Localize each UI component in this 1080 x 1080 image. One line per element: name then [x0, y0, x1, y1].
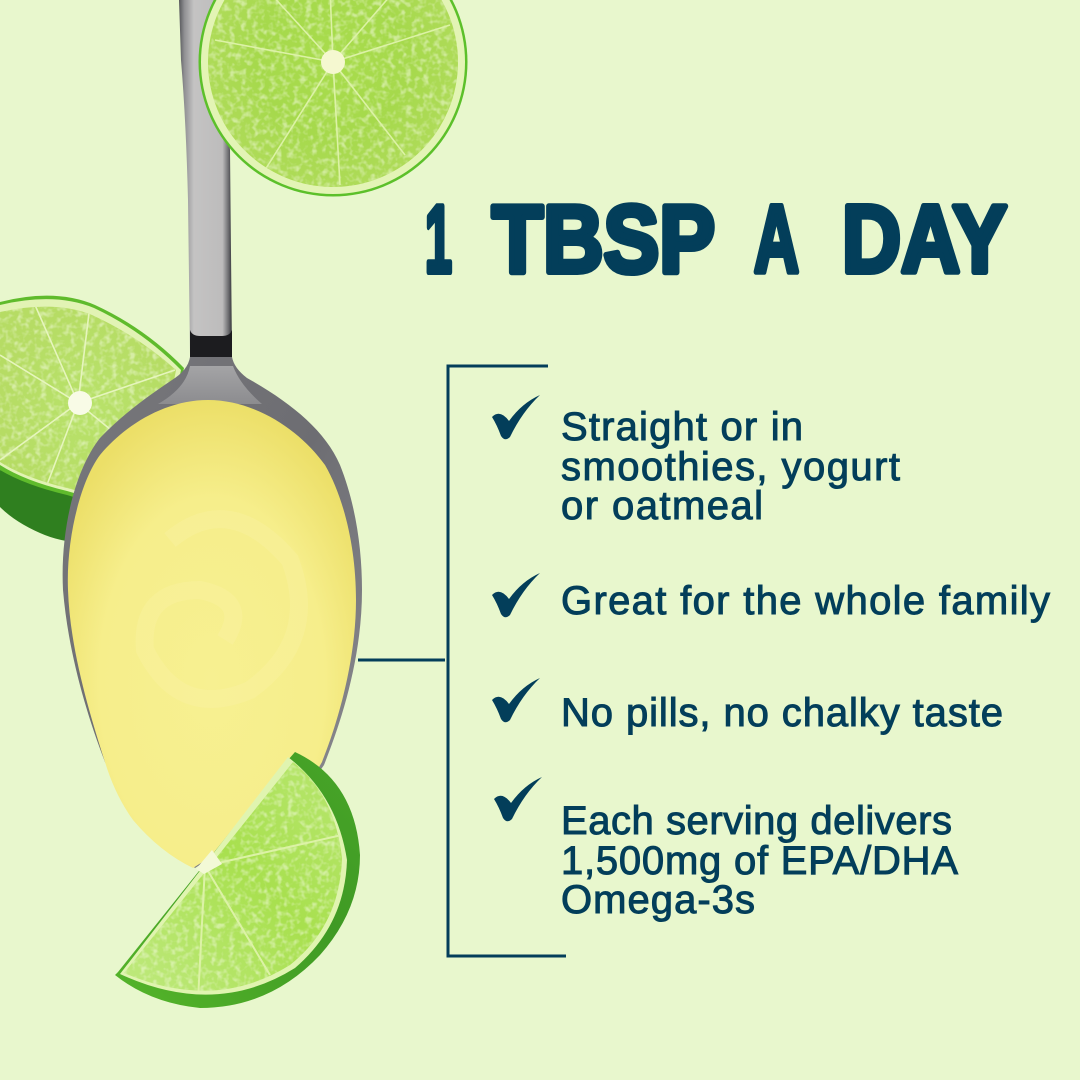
lime slice: left half, behind spoon — [0, 290, 190, 543]
benefit: omega-3s — [494, 777, 958, 922]
rind of wedge — [115, 752, 360, 1008]
title — [425, 186, 1007, 293]
text — [561, 405, 900, 528]
handle shading — [190, 330, 232, 358]
lime slice: top — [198, 0, 468, 196]
rind of top lime — [198, 0, 468, 196]
pith centre of top lime — [321, 50, 345, 74]
text: Great for the whole family — [561, 579, 1050, 623]
benefit: no pills — [492, 678, 1003, 735]
text: No pills, no chalky taste — [561, 691, 1003, 735]
title: A — [754, 186, 799, 293]
icon: check — [494, 777, 542, 821]
spoon bowl — [63, 357, 362, 868]
oil in bowl — [68, 400, 356, 868]
text: Straight or in — [561, 405, 803, 449]
bowl highlight — [158, 366, 262, 404]
pith centre of left lime — [68, 391, 92, 415]
rind of left lime — [0, 470, 90, 543]
bracket — [448, 366, 566, 956]
spoon — [63, 0, 362, 868]
pulp texture of top lime — [198, 0, 468, 190]
icon: check — [492, 678, 540, 722]
title: TBSP — [492, 186, 715, 293]
oil swirl — [145, 519, 299, 699]
pith ring of top lime — [201, 0, 465, 194]
segment lines of left lime — [0, 306, 176, 489]
connector line — [358, 658, 445, 662]
icon: check — [492, 573, 540, 617]
flesh of top lime — [208, 0, 458, 187]
flesh of left lime — [0, 296, 184, 520]
pith of wedge — [120, 757, 347, 995]
text: Omega-3s — [561, 878, 755, 922]
text: smoothies, yogurt — [561, 445, 900, 489]
pulp of wedge — [124, 762, 342, 990]
flesh of wedge — [124, 762, 342, 991]
benefit: straight or in smoothies — [492, 395, 900, 528]
text: or oatmeal — [561, 484, 763, 528]
benefit: whole family — [492, 573, 1050, 623]
text: Each serving delivers — [561, 799, 952, 843]
title: DAY — [842, 186, 1007, 293]
icon: check — [492, 395, 540, 439]
title: 1 — [425, 186, 452, 293]
text: 1,500mg of EPA/DHA — [561, 839, 958, 883]
text — [561, 799, 958, 922]
lime wedge — [115, 752, 360, 1008]
pith centre of wedge — [196, 850, 222, 874]
spoon handle — [179, 0, 232, 355]
